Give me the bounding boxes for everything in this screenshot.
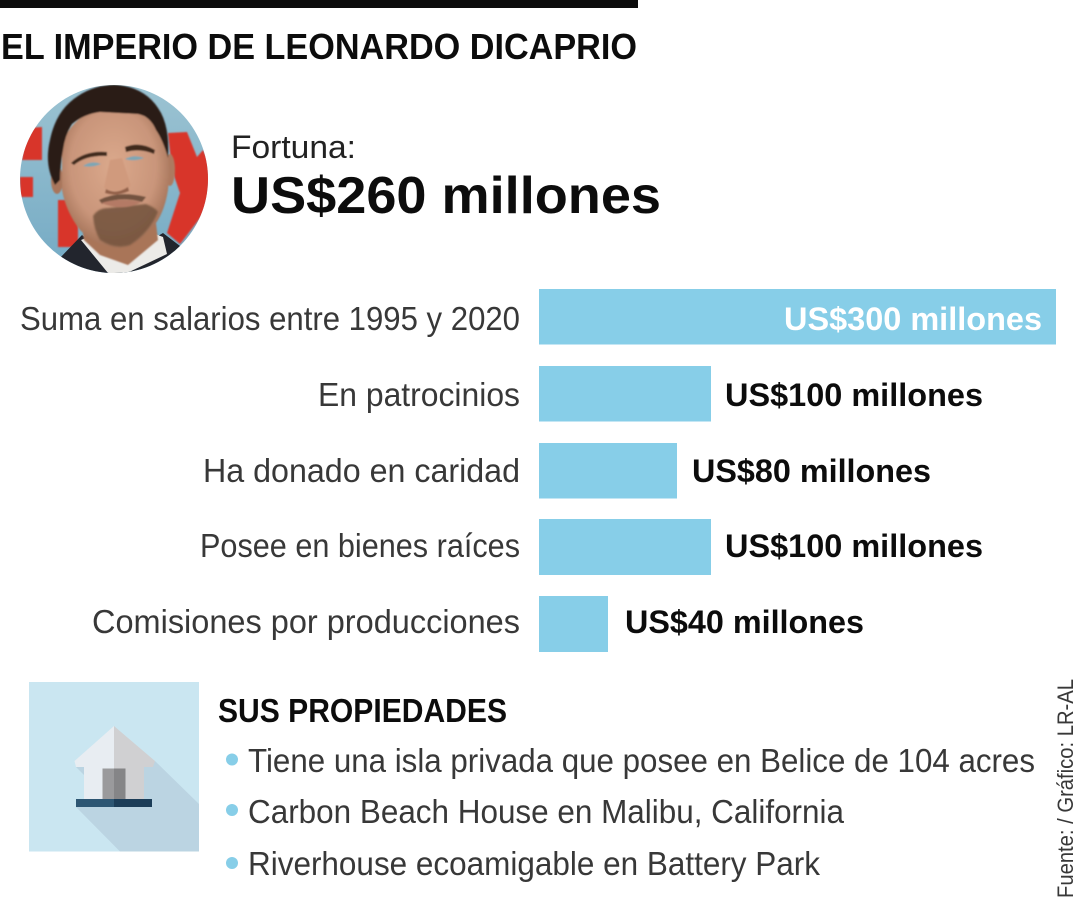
neck, head and features (48, 85, 175, 265)
row: salaries: US$300 millones (784, 301, 1042, 337)
title: EL IMPERIO DE LEONARDO DICAPRIO (1, 26, 637, 67)
properties list: Riverhouse ecoamigable en Battery Park (248, 845, 820, 882)
top rule (0, 0, 638, 8)
fortune value: US$260 millones (231, 167, 661, 225)
eyes (83, 162, 101, 167)
row: real estate: Posee en bienes raíces (200, 527, 520, 564)
row: production fees (92, 596, 864, 652)
beard (93, 204, 158, 247)
shirt collar (81, 232, 167, 273)
hair (48, 85, 168, 185)
eye shadow and nose (106, 158, 127, 188)
row: real estate: US$100 millones (725, 528, 983, 564)
row: charity: US$80 millones (692, 453, 931, 489)
row: salaries (20, 289, 1056, 344)
face (62, 107, 169, 248)
neck (82, 222, 159, 266)
ears (51, 166, 63, 194)
source credit: Fuente: / Gráfico: LR-AL (1053, 679, 1078, 898)
bar chart (20, 289, 1056, 652)
row: production fees: Comisiones por producciones (92, 603, 520, 640)
row: salaries: Suma en salarios entre 1995 y 2020 (20, 300, 520, 337)
row: charity (203, 443, 931, 498)
row: sponsorships: US$100 millones (725, 377, 983, 413)
row: sponsorships (318, 366, 983, 422)
row: sponsorships: En patrocinios (318, 376, 520, 413)
properties list: Carbon Beach House en Malibu, California (248, 793, 845, 830)
properties list (226, 742, 1035, 882)
row: charity: Ha donado en caridad (203, 452, 520, 489)
suit (61, 233, 180, 273)
properties heading: SUS PROPIEDADES (218, 692, 507, 729)
icon: house (29, 682, 199, 852)
eyebrows (71, 152, 107, 165)
portrait photo (20, 85, 210, 273)
row: production fees: US$40 millones (625, 604, 864, 640)
mouth (101, 200, 141, 207)
moustache (99, 194, 146, 204)
fortune label: Fortuna: (231, 129, 356, 165)
row: real estate (200, 519, 983, 575)
properties list: Tiene una isla privada que posee en Belice de 104 acres (248, 742, 1035, 779)
